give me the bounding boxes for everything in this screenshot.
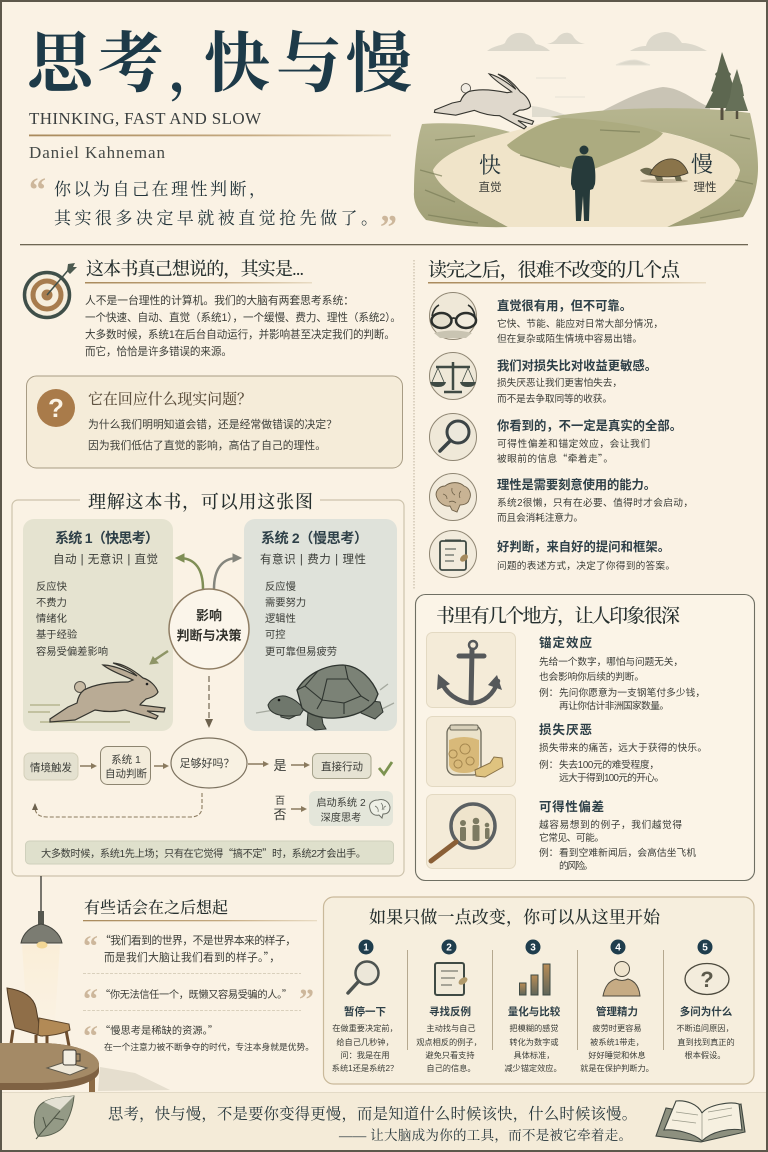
icon: person xyxy=(603,962,640,996)
icon: open book xyxy=(656,1101,745,1142)
takeaway 5: 问题的表述方式，决定了你得到的答案。 xyxy=(497,559,675,572)
icon: question bubble: ? xyxy=(700,967,714,992)
label yes: 是 xyxy=(273,758,287,773)
quote 2: “你无法信任一个，既懒又容易受骗的人。” xyxy=(100,986,292,1001)
outcome: act xyxy=(312,754,371,778)
body text xyxy=(85,293,401,358)
step 2: 主动找与自己 xyxy=(426,1023,476,1033)
summary bar: 大多数时候，系统1先上场；只有在它觉得“搞不定”时，系统2才会出手。 xyxy=(41,845,366,860)
example: 例： xyxy=(539,758,558,771)
centre circle: 判断与决策 xyxy=(176,628,242,643)
outcome: act: 直接行动 xyxy=(321,760,363,773)
label no xyxy=(273,795,287,822)
english title: THINKING, FAST AND SLOW xyxy=(29,109,262,128)
step 2: 避免只看支持 xyxy=(425,1050,475,1060)
mountain xyxy=(590,87,710,119)
idea: availability bias: 可得性偏差 xyxy=(539,799,604,814)
title: 快与慢 xyxy=(204,28,412,101)
takeaway 2: 我们对损失比对收益更敏感。 xyxy=(497,358,657,373)
man xyxy=(571,146,595,221)
callout text: 为什么我们明明知道会错，还是经常做错误的决定？ xyxy=(88,417,337,431)
step 4: 4 xyxy=(615,942,621,954)
tagline quote: 你以为自己在理性判断， xyxy=(54,180,266,199)
icon: notepad xyxy=(435,963,469,995)
callout heading: 它在回应什么现实问题？ xyxy=(88,391,252,408)
takeaway 3: 可得性偏差和锚定效应，会让我们 xyxy=(497,437,650,450)
section: quotes xyxy=(83,898,317,1053)
diagram heading: 理解这本书，可以用这张图 xyxy=(88,492,313,513)
road labels: 快 xyxy=(479,153,501,178)
card: system 2: 逻辑性 xyxy=(265,612,296,625)
sand road xyxy=(433,119,740,227)
label no: 否 xyxy=(273,807,287,822)
step 2: 自己的信息。 xyxy=(426,1063,476,1073)
header: title block xyxy=(27,28,412,246)
step 1: 暂停一下 xyxy=(344,1005,386,1018)
callout: real question xyxy=(26,376,402,468)
clouds xyxy=(487,32,707,97)
step 5 xyxy=(676,940,735,1060)
body text: 一个快速、自动、直觉（系统1），一个缓慢、费力、理性（系统2）。 xyxy=(85,311,401,324)
quote 3: “慢思考是稀缺的资源。” xyxy=(100,1022,218,1037)
step 2: 寻找反例 xyxy=(429,1005,471,1018)
step 5: 5 xyxy=(702,942,708,954)
flowchart xyxy=(24,738,393,826)
panel heading: 书里有几个地方，让人印象很深 xyxy=(436,605,680,627)
step 4 xyxy=(580,940,654,1073)
takeaway 3: 你看到的，不一定是真实的全部。 xyxy=(497,418,682,433)
hero illustration: fork in the road xyxy=(414,32,758,227)
panel: where to start xyxy=(324,897,754,1084)
icon: target xyxy=(24,263,77,318)
card: system 2: 可控 xyxy=(265,628,286,641)
card: system 2 xyxy=(244,519,397,731)
icon: leaf xyxy=(34,1096,74,1139)
takeaway 2 xyxy=(430,352,657,405)
panel: system diagram xyxy=(12,492,404,876)
takeaway 1: 直觉很有用，但不可靠。 xyxy=(497,298,632,313)
example: 远大于得到100元的开心。 xyxy=(559,771,664,784)
flow arrows xyxy=(32,761,310,817)
idea: anchoring: 锚定效应 xyxy=(539,635,592,650)
card: system 1: 容易受偏差影响 xyxy=(36,645,108,658)
illustration: lamp and reading corner xyxy=(0,876,170,1093)
icon: bar chart xyxy=(520,964,550,995)
rabbit illustration xyxy=(28,663,165,722)
step 3 xyxy=(504,940,562,1073)
icon: magnifier xyxy=(348,962,378,993)
card: system 2: 需要努力 xyxy=(265,596,306,609)
outcome: start system 2: 深度思考 xyxy=(321,811,361,824)
quote 2: ” xyxy=(299,983,314,1016)
callout text xyxy=(88,417,337,452)
turtle xyxy=(640,159,688,183)
centre circle: 影响 xyxy=(196,608,222,623)
grass tufts xyxy=(420,130,753,223)
body text: 而它，恰恰是许多错误的来源。 xyxy=(85,345,232,358)
icon: check xyxy=(379,762,392,774)
step: system 1 xyxy=(100,746,150,784)
card: system 1: 反应快 xyxy=(36,580,68,593)
icon: coin jar xyxy=(447,725,503,777)
step 3: 把模糊的感觉 xyxy=(509,1023,559,1033)
step 4: 就是在保护判断力。 xyxy=(580,1063,654,1073)
step 5: 多问为什么 xyxy=(680,1005,733,1018)
step: trigger xyxy=(24,753,78,780)
idea: availability bias: 它常见、可能。 xyxy=(539,831,604,844)
takeaway 3 xyxy=(430,414,682,465)
tagline quote: ” xyxy=(380,209,397,246)
takeaway 2: 损失厌恶让我们更害怕失去， xyxy=(497,376,622,389)
idea: loss aversion: 损失厌恶 xyxy=(539,722,592,737)
takeaway 1: 它快、节能、能应对日常大部分情况， xyxy=(497,317,663,330)
title: ， xyxy=(169,45,221,102)
tagline quote: 其实很多决定早就被直觉抢先做了。 xyxy=(54,208,378,228)
takeaway 4: 系统2很懒，只有在必要、值得时才会启动， xyxy=(497,496,693,509)
icon: checklist xyxy=(430,530,476,578)
icon: brain xyxy=(430,474,476,520)
panel: memorable ideas xyxy=(416,594,754,880)
step 5: 直到找到真正的 xyxy=(677,1037,735,1047)
card: system 1: 自动 | 无意识 | 直觉 xyxy=(53,552,158,566)
step 1: 问：我是在用 xyxy=(340,1050,390,1060)
step 1: 给自己几秒钟， xyxy=(336,1037,394,1047)
takeaway 5 xyxy=(430,530,675,578)
step 5: 根本假设。 xyxy=(685,1050,725,1060)
title: 思考 xyxy=(27,28,164,101)
card: system 2: 有意识 | 费力 | 理性 xyxy=(260,552,366,566)
closing line: 思考，快与慢，不是要你变得更慢，而是知道什么时候该快，什么时候该慢。 xyxy=(108,1106,637,1123)
quote 1 xyxy=(83,930,296,965)
turtle illustration xyxy=(256,665,394,730)
road labels xyxy=(478,152,716,194)
step 2: 观点相反的例子， xyxy=(416,1037,482,1047)
road labels: 直觉 xyxy=(478,180,502,194)
example: 先问你愿意为一支钢笔付多少钱， xyxy=(559,686,705,699)
idea: loss aversion: 损失带来的痛苦，远大于获得的快乐。 xyxy=(539,741,707,754)
step 1 xyxy=(332,940,398,1073)
example: 看到空难新闻后，会高估坐飞机 xyxy=(559,846,696,859)
step 2 xyxy=(416,940,482,1073)
quotes heading: 有些话会在之后想起 xyxy=(84,898,228,917)
card: system 1: 情绪化 xyxy=(36,612,67,625)
card: system 2: 系统 2（慢思考） xyxy=(261,530,368,546)
table xyxy=(0,1043,170,1093)
quote 1: “ xyxy=(83,930,98,963)
quote 2 xyxy=(83,983,314,1016)
icon: glasses xyxy=(430,292,476,340)
rabbit xyxy=(434,63,542,133)
decision xyxy=(171,738,247,788)
grass right xyxy=(550,108,758,227)
quote 1: “我们看到的世界，不是世界本来的样子， xyxy=(100,932,296,948)
idea: availability bias xyxy=(426,794,696,872)
idea: loss aversion xyxy=(426,716,707,786)
panel heading: 如果只做一点改变，你可以从这里开始 xyxy=(369,908,661,927)
step 4: 好好睡觉和休息 xyxy=(588,1050,646,1060)
step 5: 不断追问原因， xyxy=(676,1023,734,1033)
example xyxy=(539,758,664,784)
lamp xyxy=(21,876,62,1035)
body text: 大多数时候，系统1在后台自动运行，并影响甚至决定我们的判断。 xyxy=(85,328,395,341)
takeaways heading: 读完之后，很难不改变的几个点 xyxy=(428,259,681,281)
quote 3: 在一个注意力被不断争夺的时代，专注本身就是优势。 xyxy=(104,1041,314,1052)
heading: 这本书真己想说的，其实是... xyxy=(86,258,304,280)
section: what the book says xyxy=(24,258,401,358)
tagline quote: “ xyxy=(29,172,46,209)
step: trigger: 情境触发 xyxy=(30,761,72,774)
trees xyxy=(705,52,748,120)
icon: magnifier xyxy=(430,414,476,460)
icon: anchor xyxy=(437,641,502,703)
takeaway 1: 但在复杂或陌生情境中容易出错。 xyxy=(497,332,642,345)
label no: 百 xyxy=(275,795,285,807)
takeaway 4 xyxy=(430,474,693,524)
author: Daniel Kahneman xyxy=(29,143,166,162)
takeaway 4: 而且会消耗注意力。 xyxy=(497,511,583,524)
idea: anchoring: 先给一个数字，哪怕与问题无关， xyxy=(539,655,683,668)
takeaway 4: 理性是需要刻意使用的能力。 xyxy=(497,477,656,492)
takeaway 2: 而不是去争取同等的收获。 xyxy=(497,392,612,405)
closing sub-line: —— 让大脑成为你的工具，而不是被它牵着走。 xyxy=(338,1127,632,1144)
idea: availability bias: 越容易想到的例子，我们越觉得 xyxy=(539,818,682,831)
title xyxy=(27,28,412,102)
icon: question mark: ? xyxy=(48,393,64,423)
example xyxy=(539,846,696,872)
example: 失去100元的难受程度， xyxy=(559,758,659,771)
step: system 1: 系统 1 xyxy=(111,753,141,766)
step 4: 被系统1带走， xyxy=(590,1037,644,1047)
takeaway 1 xyxy=(430,292,663,345)
step 1: 系统1还是系统2？ xyxy=(332,1063,398,1073)
example: 的风险。 xyxy=(559,859,593,872)
road labels: 理性 xyxy=(694,180,716,194)
outcome: start system 2: 启动系统 2 xyxy=(316,796,366,809)
quote 3: “ xyxy=(83,1020,98,1053)
card: system 2: 反应慢 xyxy=(265,580,296,593)
summary bar xyxy=(26,841,394,864)
body text: 人不是一台理性的计算机。我们的大脑有两套思考系统： xyxy=(85,293,354,307)
step 1: 在做重要决定前， xyxy=(332,1023,398,1033)
card: system 1: 基于经验 xyxy=(36,628,78,641)
step 3: 3 xyxy=(530,942,536,954)
takeaway 5: 好判断，来自好的提问和框架。 xyxy=(497,539,670,554)
step 2: 2 xyxy=(446,942,452,954)
step 3: 减少锚定效应。 xyxy=(504,1063,562,1073)
step: system 1: 自动判断 xyxy=(105,767,147,780)
chair xyxy=(7,988,70,1058)
quote 1: 而是我们大脑让我们看到的样子。”， xyxy=(104,949,280,965)
icon: question mark xyxy=(37,389,75,427)
card: system 2: 更可靠但易疲劳 xyxy=(265,645,337,658)
example xyxy=(539,686,705,712)
quote 2: “ xyxy=(83,983,98,1016)
road labels: 慢 xyxy=(691,152,713,177)
card: system 1: 不费力 xyxy=(36,596,67,609)
takeaway 3: 被眼前的信息“牵着走”。 xyxy=(497,451,613,465)
icon: magnifier with people xyxy=(431,804,495,861)
tagline quote xyxy=(29,172,397,246)
step 3: 量化与比较 xyxy=(508,1005,561,1018)
centre island xyxy=(507,118,663,172)
arrows from centre xyxy=(150,554,241,728)
quote 3 xyxy=(83,1020,314,1053)
step 4: 疲劳时更容易 xyxy=(592,1023,642,1033)
example: 例： xyxy=(539,846,558,859)
outcome: start system 2 xyxy=(309,791,393,826)
decision: 足够好吗？ xyxy=(180,756,234,770)
idea: anchoring: 也会影响你后续的判断。 xyxy=(539,670,644,683)
step 3: 转化为数字或 xyxy=(509,1037,559,1047)
example: 例： xyxy=(539,686,558,699)
idea: anchoring xyxy=(426,632,705,712)
step 1: 1 xyxy=(363,942,369,954)
centre circle xyxy=(169,589,249,669)
card: system 1 xyxy=(23,519,173,731)
section: takeaways xyxy=(428,259,706,578)
grass left xyxy=(414,123,510,227)
card: system 1: 系统 1（快思考） xyxy=(55,530,159,546)
example: 再让你估计非洲国家数量。 xyxy=(559,699,669,712)
icon: scales xyxy=(430,352,476,400)
step 3: 具体标准， xyxy=(514,1050,554,1060)
step 4: 管理精力 xyxy=(596,1005,638,1018)
footer band xyxy=(2,1092,766,1150)
callout text: 因为我们低估了直觉的影响，高估了自己的理性。 xyxy=(88,438,326,452)
